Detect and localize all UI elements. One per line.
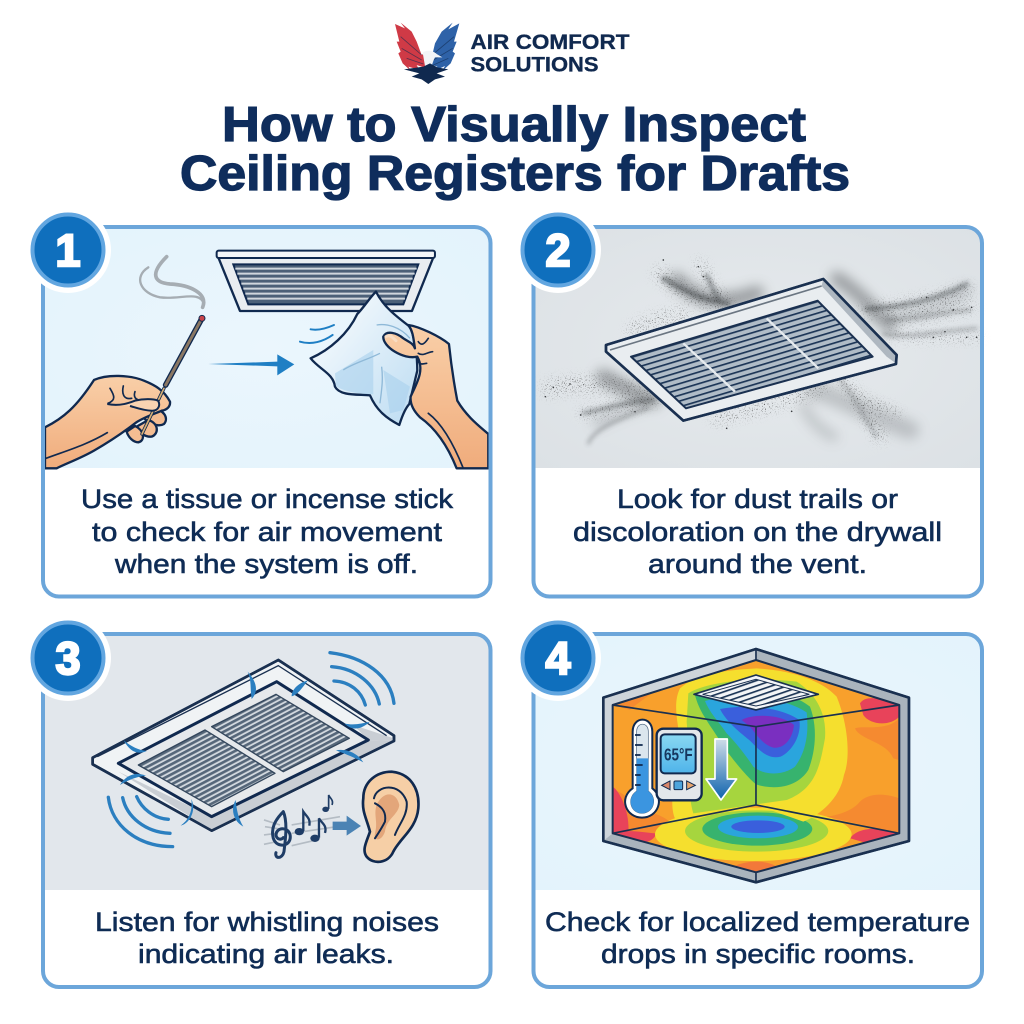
- card background: [534, 634, 982, 890]
- title: Ceiling Registers for Drafts: [180, 147, 850, 201]
- caption 2: [573, 484, 942, 579]
- icon: sound waves: [108, 653, 394, 847]
- icon: thermostat: [657, 729, 702, 800]
- arrow: [208, 354, 294, 375]
- icon: leak swooshes: [120, 672, 370, 827]
- dust haze: [597, 278, 967, 437]
- number badge 1: [25, 207, 111, 293]
- dust specks: [545, 260, 977, 428]
- card border: [534, 227, 982, 596]
- card background: [43, 227, 490, 468]
- wall and ceiling contours: [672, 668, 848, 822]
- caption 3: indicating air leaks.: [138, 939, 394, 969]
- icon: angled vent: [606, 279, 897, 421]
- chart: heat map: [610, 658, 903, 875]
- caption 1: Use a tissue or incense stick: [81, 484, 454, 514]
- number badge 2: 2: [545, 225, 571, 276]
- icon: right hand: [383, 325, 488, 468]
- illustration: vent, hands, tissue and incense: [45, 251, 488, 468]
- caption 4: drops in specific rooms.: [601, 939, 915, 969]
- caption 3: Listen for whistling noises: [95, 907, 439, 937]
- card border: [43, 227, 490, 596]
- brand name: SOLUTIONS: [470, 54, 598, 76]
- icon: ear: [363, 772, 418, 862]
- dust trails: [583, 275, 977, 443]
- icon: air lines: [300, 325, 334, 343]
- panel: step 1 tissue or incense test: [25, 207, 490, 596]
- number badge 3: [25, 615, 111, 701]
- caption 4: Check for localized temperature: [545, 907, 970, 937]
- illustration: dusty vent: [545, 260, 977, 443]
- floor gradient bands: [655, 808, 852, 861]
- caption 4: [545, 907, 970, 969]
- caption 1: to check for air movement: [92, 517, 443, 547]
- illustration: thermal room: [603, 649, 909, 882]
- brand name: [470, 31, 630, 76]
- arrow: [706, 739, 737, 800]
- icon: incense stick: [166, 315, 205, 385]
- illustration: vent, sound waves and ear: [93, 653, 418, 862]
- panel: step 3 whistling noises: [25, 615, 490, 987]
- caption 1: [81, 484, 454, 579]
- number badge 4: [515, 615, 601, 701]
- card border: [43, 634, 490, 987]
- card border: [534, 634, 982, 987]
- number badge 1: 1: [55, 225, 81, 276]
- icon: eagle emblem: [395, 23, 459, 84]
- room edges: [613, 705, 899, 833]
- title: How to Visually Inspect: [222, 98, 806, 152]
- caption 1: when the system is off.: [114, 549, 418, 579]
- icon: smoke: [140, 257, 204, 307]
- icon: ceiling vent: [694, 675, 818, 710]
- icon: music notes: [264, 795, 340, 857]
- icon: left hand: [45, 376, 170, 468]
- caption 2: Look for dust trails or: [617, 484, 898, 514]
- panel: step 4 temperature drops: [515, 615, 982, 987]
- caption 3: [95, 907, 439, 969]
- icon: tissue: [311, 292, 417, 425]
- number badge 3: 3: [55, 633, 81, 684]
- card background: [43, 634, 490, 890]
- card background: [534, 227, 982, 468]
- icon: thermostat: 65°F: [664, 745, 693, 765]
- logo: Air Comfort Solutions: [395, 23, 630, 84]
- icon: ceiling vent: [217, 251, 435, 311]
- title: [180, 98, 850, 201]
- dust speckle: [550, 263, 977, 437]
- arrow: [333, 816, 361, 836]
- icon: thermometer: [625, 720, 659, 818]
- icon: room frame: [603, 649, 909, 882]
- number badge 4: 4: [545, 633, 571, 684]
- brand name: AIR COMFORT: [470, 31, 630, 54]
- number badge 2: [515, 207, 601, 293]
- panel: step 2 dust trails: [515, 207, 982, 596]
- icon: ceiling register: [93, 660, 394, 831]
- caption 2: around the vent.: [648, 549, 867, 579]
- caption 2: discoloration on the drywall: [573, 517, 942, 547]
